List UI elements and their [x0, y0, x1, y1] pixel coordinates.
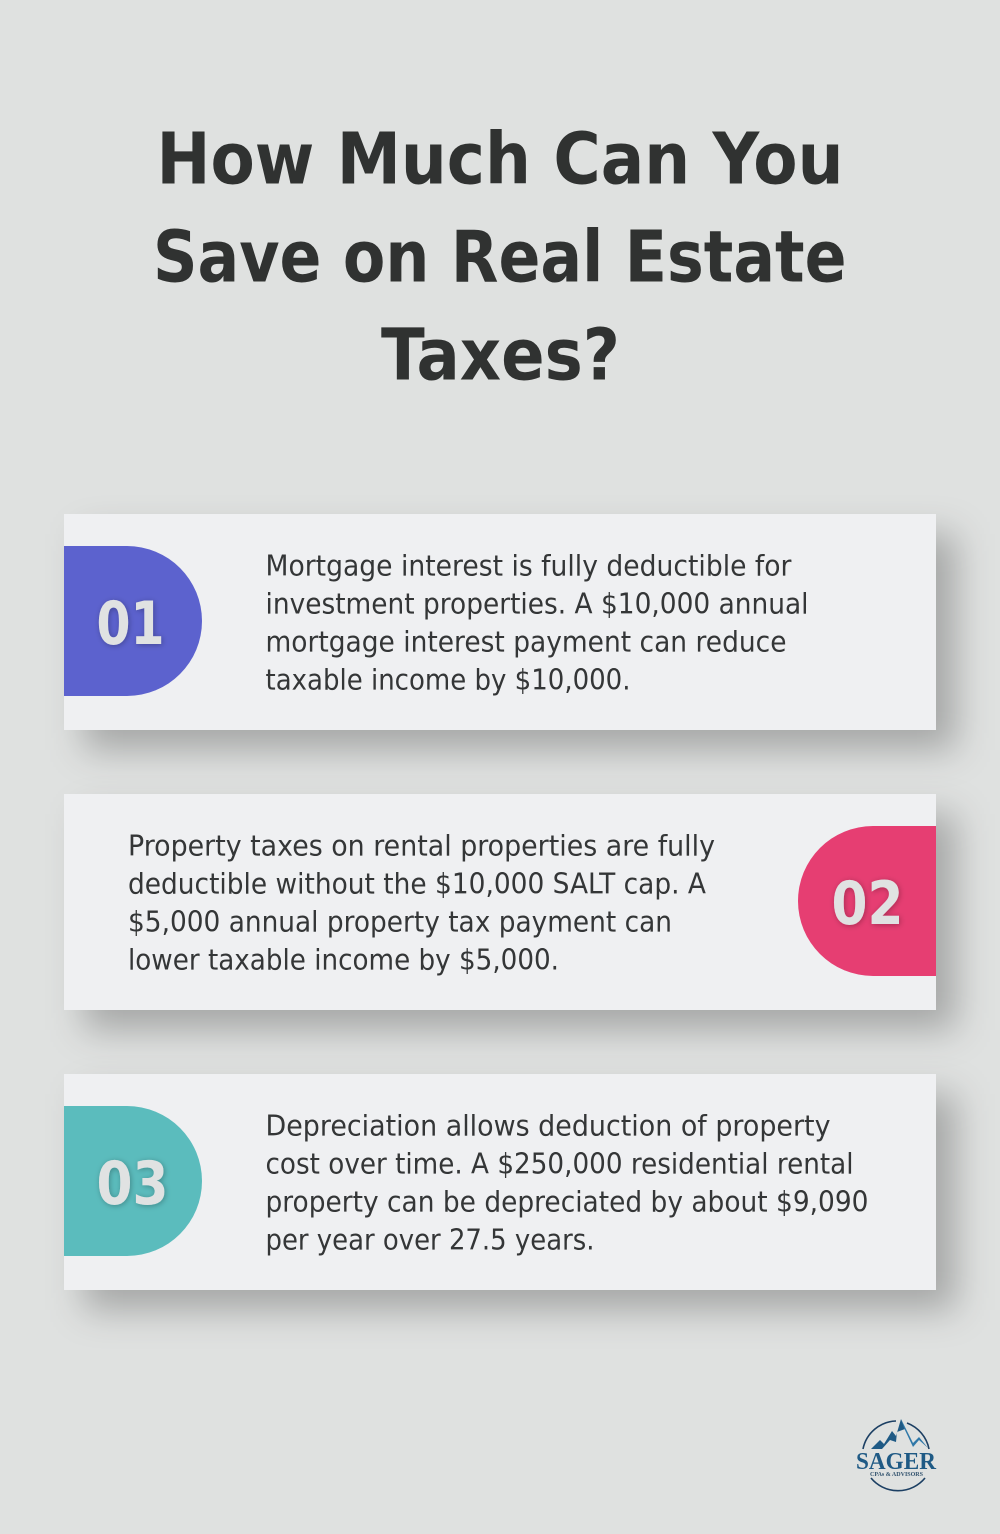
- text: property tax deduction: [128, 830, 715, 976]
- badge: 03: 03: [96, 1149, 168, 1219]
- text: mortgage interest deduction: investment properties. A $10,000 annual: [266, 588, 808, 620]
- badge: 02: 02: [832, 869, 904, 939]
- text: depreciation deduction: cost over time. A $250,000 residential rental: [266, 1148, 854, 1180]
- panel: step 03 depreciation: [64, 1074, 956, 1310]
- text: mortgage interest deduction: mortgage interest payment can reduce: [266, 626, 786, 658]
- title: Taxes?: [381, 314, 620, 396]
- text: property tax deduction: deductible without the $10,000 SALT cap. A: [128, 868, 706, 900]
- title: How Much Can You: [156, 118, 844, 200]
- title: [153, 118, 846, 396]
- badge: 01: 01: [96, 589, 164, 659]
- text: property tax deduction: $5,000 annual property tax payment can: [128, 906, 672, 938]
- badge: 01: [64, 546, 202, 696]
- icon: Sager logo: [856, 1419, 937, 1491]
- title: Save on Real Estate: [153, 216, 846, 298]
- text: mortgage interest deduction: taxable income by $10,000.: [266, 664, 630, 696]
- text: property tax deduction: lower taxable income by $5,000.: [128, 944, 559, 976]
- badge: 03: [64, 1106, 202, 1256]
- panel: step 02 property taxes: [64, 794, 956, 1030]
- text: mortgage interest deduction: [266, 550, 808, 696]
- text: depreciation deduction: Depreciation allows deduction of property: [266, 1110, 831, 1142]
- text: property tax deduction: Property taxes on rental properties are fully: [128, 830, 715, 862]
- text: depreciation deduction: per year over 27.5 years.: [266, 1224, 594, 1256]
- text: depreciation deduction: [266, 1110, 868, 1256]
- icon: Sager logo: CPAs & ADVISORS: [870, 1472, 924, 1478]
- text: depreciation deduction: property can be depreciated by about $9,090: [266, 1186, 868, 1218]
- badge: 02: [798, 826, 936, 976]
- icon: Sager logo: SAGER: [856, 1449, 937, 1475]
- panel: step 01 mortgage interest: [64, 514, 956, 750]
- text: mortgage interest deduction: Mortgage interest is fully deductible for: [266, 550, 792, 582]
